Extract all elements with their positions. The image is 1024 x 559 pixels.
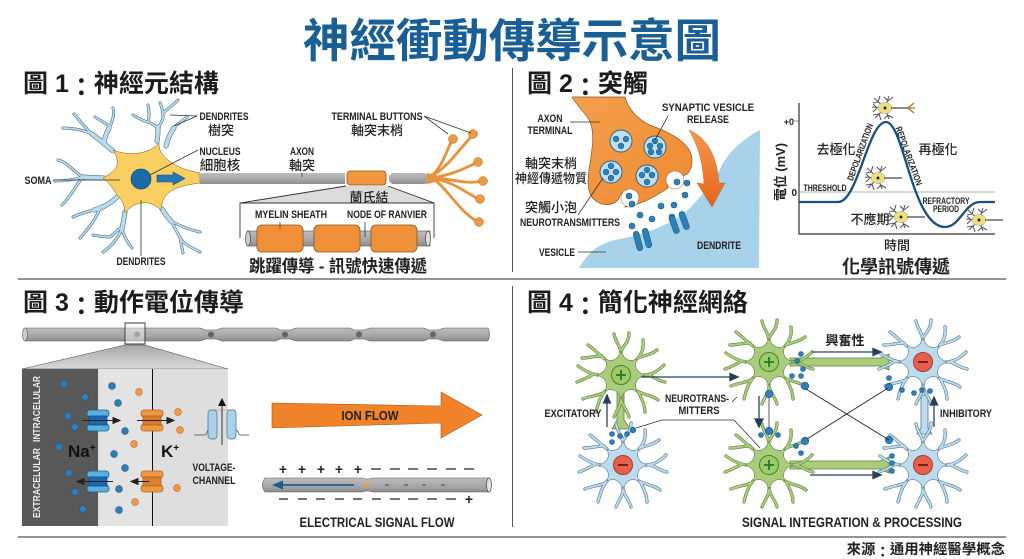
inset: myelinated axon [246,225,430,252]
heading: figure 2: ： [573,74,598,102]
chart labels: PERIOD [933,204,959,215]
labels: 興奮性 [825,333,865,348]
excitatory neuron E [725,423,813,507]
chart labels: 再極化 [918,142,958,157]
labels: NEUROTRANS- [665,393,729,405]
chart labels: 電位 (mV) [773,143,788,201]
arrow: ion flow: ION FLOW [342,408,399,423]
arrow: release direction [689,130,725,207]
heading: figure 1: 圖 1 [23,70,69,98]
chart labels: 不應期 [850,212,890,227]
labels: 蘭氏結 [349,190,389,205]
electrical signal flow: + [279,461,287,477]
heading: figure 3: ： [69,293,94,321]
neurotransmitter dots [610,352,932,474]
heading: figure 3: 圖 3 [23,289,69,317]
ions [56,381,128,513]
labels: INHIBITORY [940,408,993,420]
chart labels: REPOLARIZATION [894,125,924,187]
labels: 樹突 [208,123,234,138]
panel: action potential conduction [22,288,492,530]
labels: NUCLEUS [200,146,240,158]
title: 神經衝動傳導示意圖 [303,15,721,67]
mini neuron: refractory [888,205,925,229]
voltage channel icon [194,398,249,445]
electrical signal flow: + [317,461,325,477]
labels [515,102,754,259]
labels: 細胞核 [200,157,241,173]
voltage channel label [192,462,236,487]
heading: figure 2: 圖 2 [527,70,573,98]
panel: synapse [515,69,1003,277]
excitatory neuron C [725,320,813,404]
chart labels: DEPOLARIZATION [845,122,875,182]
axon [200,173,345,184]
terminal of mini neuron [908,103,915,113]
network arrows [604,348,938,478]
labels: DENDRITES [200,111,248,123]
node of Ranvier [347,171,386,185]
channels [87,410,163,492]
curve [799,122,995,227]
heading: figure 4: 簡化神經網絡 [598,289,748,317]
chart labels: 時間 [884,238,910,253]
axon second segment [389,173,428,184]
panel: neuron structure [23,70,488,276]
labels: AXON [290,146,314,158]
labels: 神經傳遞物質 [515,171,587,186]
labels: TERMINAL [528,125,573,137]
inhibitory neuron D [879,320,967,404]
axon terminal [572,97,692,207]
long axon [22,323,490,344]
labels: 軸突 [289,158,315,173]
inset frame [240,186,434,238]
electrical signal flow [262,461,492,530]
vertical label: intracellular: INTRACELULAR [31,376,43,442]
mini neuron: peak [872,96,909,120]
potassium label: + [173,443,179,454]
axes [799,103,995,234]
arrow: signal direction [157,172,185,185]
heading: figure 4: ： [573,293,598,321]
axon terminals [427,130,488,226]
chart: action potential [773,96,1003,277]
labels: SYNAPTIC VESICLE [662,102,754,114]
arrow: ion flow [272,392,482,438]
labels: 突觸小泡 [525,200,577,215]
inhibitory neuron B [579,423,667,507]
nucleus [131,169,151,189]
labels: TERMINAL BUTTONS [332,111,422,123]
panel: neural network [527,289,993,530]
network axons [612,354,932,473]
channel arrows [77,418,174,484]
electrical signal flow: + [465,491,473,507]
inhibitory neuron F [879,423,967,507]
source note: 來源 [847,542,875,558]
dendrite [579,130,760,268]
electrical signal flow: + [298,461,306,477]
chart labels: 化學訊號傳遞 [842,256,950,277]
receptors [633,211,690,251]
vertical label: extracellular: EXTRACELULAR [31,448,43,518]
labels: DENDRITES [116,256,166,268]
labels: EXCITATORY [544,408,602,420]
labels: VESICLE [539,247,575,259]
mini neuron: rest [966,208,1003,232]
electrical signal flow: + [335,461,343,477]
labels: NODE OF RANVIER [347,209,427,221]
sodium label: + [90,443,96,454]
chart labels: 0 [791,188,797,199]
labels: RELEASE [687,114,729,126]
excitatory neuron A [577,333,665,417]
chart labels: 去極化 [816,142,856,157]
exocytosis pockets [621,171,684,207]
zoom wedge [22,345,228,369]
soma [103,143,200,213]
vesicles [600,130,666,187]
heading: figure 3: 動作電位傳導 [94,288,244,317]
labels: SOMA [24,175,52,187]
electrical signal flow: ELECTRICAL SIGNAL FLOW [300,514,455,530]
labels: MITTERS [678,405,720,417]
neurotransmitters [626,179,690,229]
heading: figure 2: 突觸 [598,69,648,98]
labels [544,333,993,530]
labels: AXON [538,113,563,125]
labels: MYELIN SHEATH [255,209,327,221]
labels [24,111,427,276]
labels: SIGNAL INTEGRATION & PROCESSING [742,514,962,530]
chart labels [773,117,970,277]
chart labels: +0 [784,117,794,127]
voltage channel label: VOLTAGE- [192,462,236,474]
neurotransmitter leader lines [636,397,760,448]
source note: 通用神經醫學概念 [890,540,1005,558]
chart labels: THRESHOLD [804,183,847,194]
crossing connections [806,388,889,440]
voltage channel label: CHANNEL [192,475,236,487]
heading: figure 1: ： [69,74,94,102]
labels: 跳躍傳導 - 訊號快速傳遞 [249,256,427,276]
membrane close-up [22,369,249,526]
chart labels: REFRACTORY [922,196,970,207]
mini neuron: rising [865,166,902,190]
neuron dendrites [55,100,200,253]
leader lines [570,116,668,252]
electrical signal flow: + [354,461,362,477]
sodium label: Na [68,442,90,461]
labels: NEUROTRANSMITTERS [520,217,620,229]
labels: 軸突末梢 [525,156,577,171]
heading: figure 1: 神經元結構 [94,70,219,98]
labels: DENDRITE [697,240,741,252]
potassium label: K [161,442,173,461]
labels: 軸突末梢 [351,123,403,138]
leader lines [53,115,471,256]
zoom wedge [240,186,434,203]
heading: figure 4: 圖 4 [527,289,573,317]
